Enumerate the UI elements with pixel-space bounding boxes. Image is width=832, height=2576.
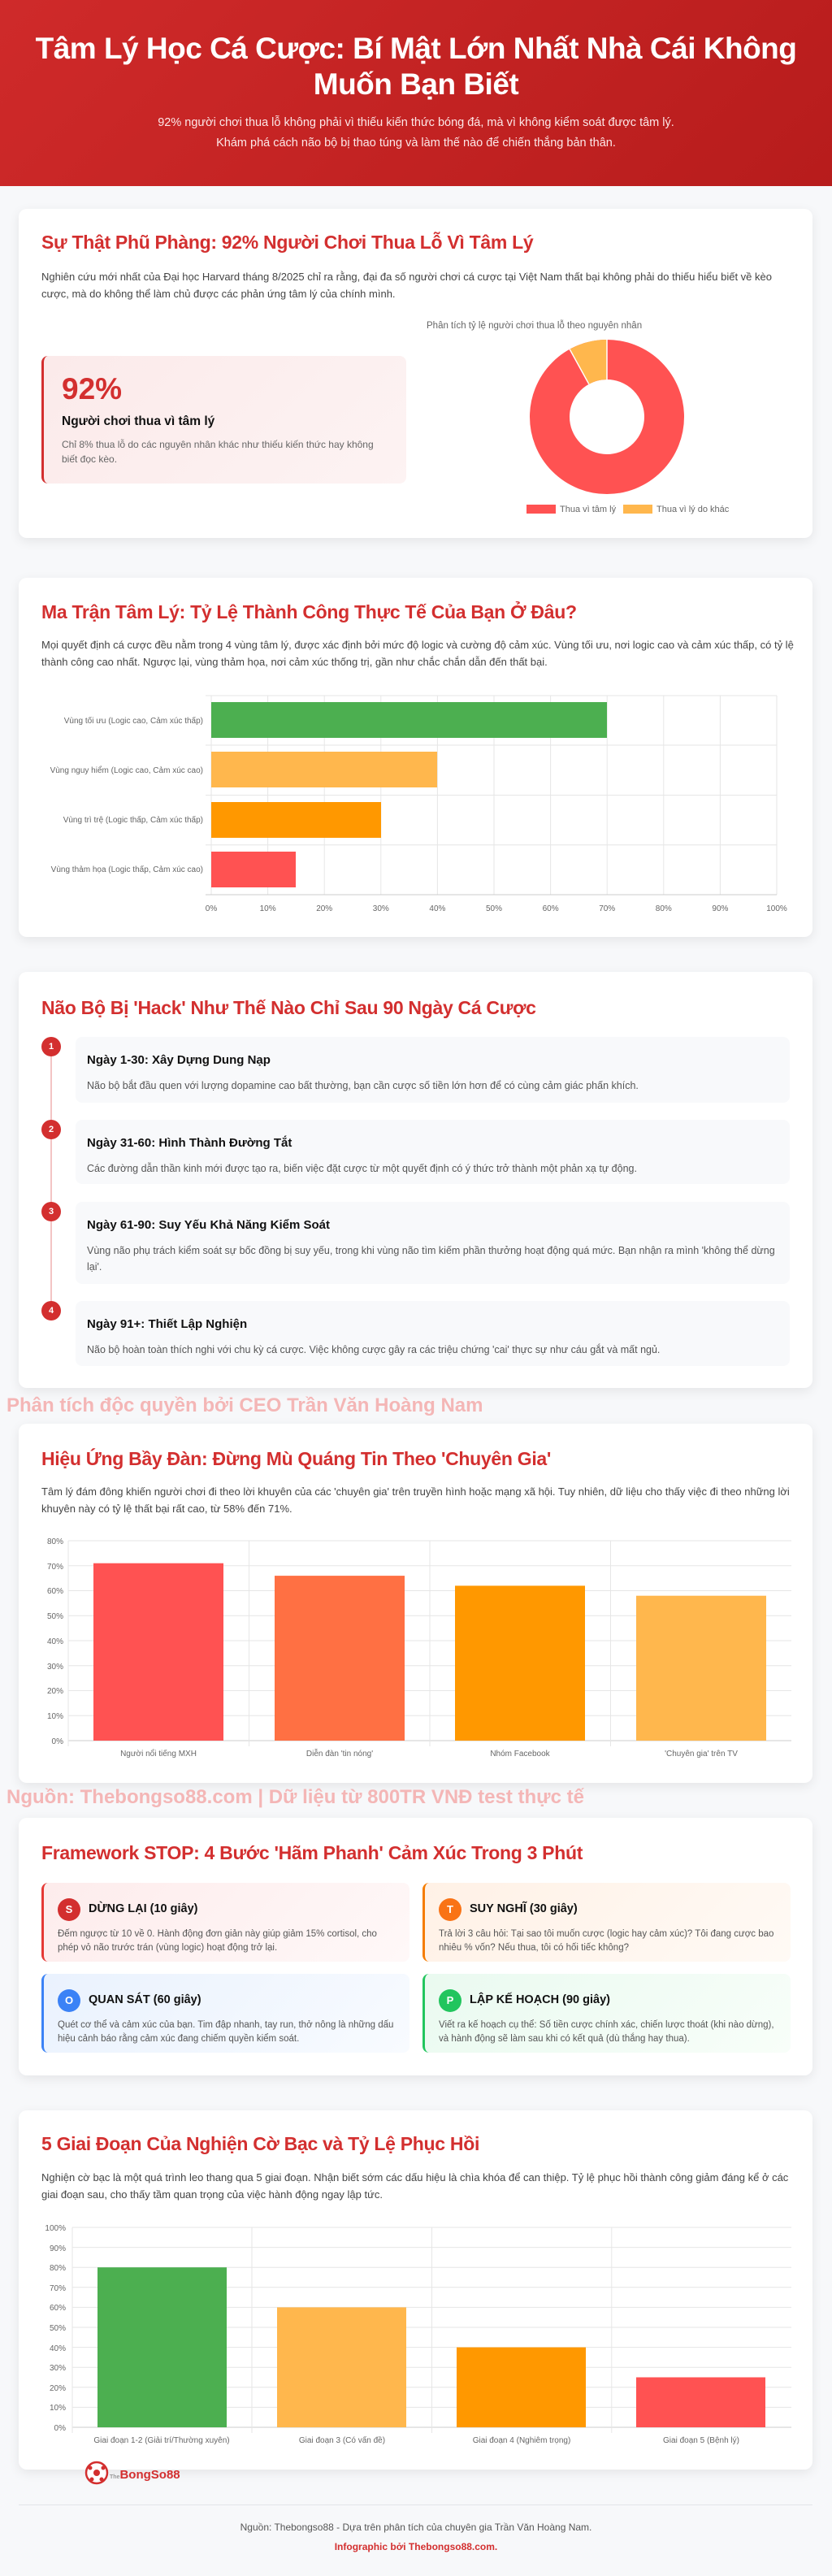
panel: herd effect [19,1424,812,1783]
step 1: 1 [49,1042,54,1052]
horizontal bar chart: Vùng thảm họa (Logic thấp, Cảm xúc cao) [51,865,203,874]
footer [240,2522,592,2552]
vertical bar chart: 40% [50,2344,66,2353]
vertical bar chart: 30% [50,2364,66,2373]
step 3: 3 [49,1207,54,1216]
vertical bar chart: 20% [47,1687,63,1696]
footer: Infographic bởi Thebongso88.com. [335,2541,497,2552]
step 1: Ngày 1-30: Xây Dựng Dung Nạp [87,1053,271,1067]
panel: STOP framework [19,1818,812,2075]
step T: SUY NGHĨ (30 giây) [470,1902,578,1915]
vertical bar chart: 0% [54,2424,66,2433]
horizontal bar chart: 40% [429,904,446,913]
horizontal bar chart: 60% [543,904,559,913]
pie chart: Thua vì lý do khác [656,505,730,514]
footer: Nguồn: Thebongso88 - Dựa trên phân tích của chuyên gia Trần Văn Hoàng Nam. [240,2522,592,2533]
step 1 [41,1037,639,1091]
panel: 5 stages [19,2110,812,2470]
step 2: Ngày 31-60: Hình Thành Đường Tắt [87,1136,292,1150]
step 4: Não bộ hoàn toàn thích nghi với chu kỳ cá cược. Việc không cược gây ra các triệu chứng 'cai' thực sự như cáu gắt và mất ngủ. [87,1344,660,1355]
vertical bar chart: 10% [47,1712,63,1721]
step 3: Ngày 61-90: Suy Yếu Khả Năng Kiểm Soát [87,1218,330,1232]
step O: QUAN SÁT (60 giây) [89,1993,202,2006]
stat callout: Chỉ 8% thua lỗ do các nguyên nhân khác như thiếu kiến thức hay không biết đọc kèo. [62,439,374,465]
horizontal bar chart: 0% [206,904,217,913]
horizontal bar chart: 20% [316,904,332,913]
text block: Nghiên cứu mới nhất của Đại học Harvard tháng 8/2025 chỉ ra rằng, đại đa số người chơi cá cược tại Việt Nam thất bại không phải do thiếu hiểu biết về kèo cược, mà do không thể làm chủ được các phản ứng tâm lý của chính mình. [41,271,772,300]
stat callout: 92% [62,372,122,405]
vertical bar chart: 10% [50,2404,66,2413]
vertical bar chart: 50% [50,2324,66,2333]
main title [36,32,796,101]
horizontal bar chart: 80% [656,904,672,913]
text block: Mọi quyết định cá cược đều nằm trong 4 vùng tâm lý, được xác định bởi mức độ logic và cường độ cảm xúc. Vùng tối ưu, nơi logic cao và cảm xúc thấp, có tỷ lệ thành công cao nhất. Ngược lại, vùng thảm họa, nơi cảm xúc thống trị, gần như chắc chắn dẫn đến thất bại. [41,639,794,668]
bars [93,1563,223,1741]
vertical bar chart: 70% [47,1563,63,1572]
step 1: Não bộ bắt đầu quen với lượng dopamine cao bất thường, bạn cần cược số tiền lớn hơn để có cùng cảm giác phấn khích. [87,1080,639,1091]
step S: DỪNG LẠI (10 giây) [89,1902,198,1915]
watermark 1: Phân tích độc quyền bởi CEO Trần Văn Hoàng Nam [6,1394,483,1416]
stat callout [41,356,406,484]
watermark 2: Nguồn: Thebongso88.com | Dữ liệu từ 800TR VNĐ test thực tế [6,1786,584,1808]
text block: Tâm lý đám đông khiến người chơi đi theo lời khuyên của các 'chuyên gia' trên truyền hình hoặc mạng xã hội. Tuy nhiên, dữ liệu cho thấy việc đi theo những lời khuyên này có tỷ lệ thất bại rất cao, từ 58% đến 71%. [41,1485,790,1515]
horizontal bar chart: 90% [712,904,729,913]
step P: P [447,1994,453,2006]
logo: TheBongSo88 [110,2468,180,2482]
vertical bar chart: Người nổi tiếng MXH [120,1749,197,1759]
horizontal bar chart: 100% [766,904,787,913]
bars [211,702,607,738]
header [0,0,832,186]
vertical bar chart: 60% [47,1587,63,1596]
vertical bar chart: 90% [50,2244,66,2253]
vertical bar chart: Giai đoạn 4 (Nghiêm trọng) [473,2436,570,2445]
panel: 92% truth [19,209,812,538]
vertical bar chart: 40% [47,1637,63,1646]
vertical bar chart: Giai đoạn 1-2 (Giải trí/Thường xuyên) [93,2436,230,2445]
heading: 5 Giai Đoạn Của Nghiện Cờ Bạc và Tỷ Lệ Phục Hồi [41,2133,479,2154]
panel: 90-day timeline [19,972,812,1388]
vertical bar chart [47,1537,791,1759]
step S: S [66,1903,72,1915]
vertical bar chart: 70% [50,2284,66,2293]
pie chart: Phân tích tỷ lệ người chơi thua lỗ theo nguyên nhân [427,320,642,331]
panel: psychology matrix [19,578,812,937]
vertical bar chart: Giai đoạn 5 (Bệnh lý) [663,2436,739,2445]
step 4 [41,1301,660,1355]
text block: Nghiện cờ bạc là một quá trình leo thang qua 5 giai đoạn. Nhận biết sớm các dấu hiệu là chìa khóa để can thiệp. Tỷ lệ phục hồi thành công giảm đáng kể ở các giai đoạn sau, cho thấy tầm quan trọng của việc hành động ngay lập tức. [41,2171,788,2201]
pie chart [427,320,730,514]
vertical bar chart: 0% [52,1737,63,1746]
horizontal bar chart: 50% [486,904,502,913]
vertical bar chart: Giai đoạn 3 (Có vấn đề) [299,2435,385,2445]
main title: Muốn Bạn Biết [314,67,518,101]
bars [98,2267,227,2427]
horizontal bar chart: 70% [599,904,615,913]
step 4: Ngày 91+: Thiết Lập Nghiện [87,1317,247,1331]
step T: Trả lời 3 câu hỏi: Tại sao tôi muốn cược (logic hay cảm xúc)? Tôi đang cược bao nhiêu % vốn? Nếu thua, tôi có hối tiếc không? [439,1929,774,1953]
step O: Quét cơ thể và cảm xúc của bạn. Tim đập nhanh, tay run, thở nông là những dấu hiệu cảnh báo rằng cảm xúc đang chiếm quyền kiểm soát. [58,2020,393,2044]
horizontal bar chart [50,696,787,913]
step P: LẬP KẾ HOẠCH (90 giây) [470,1993,610,2006]
vertical bar chart [45,2224,791,2445]
step O: O [65,1994,73,2006]
step P: Viết ra kế hoạch cụ thể: Số tiền cược chính xác, chiến lược thoát (khi nào dừng), và hành động sẽ làm sau khi có kết quả (dù thắng hay thua). [439,2020,774,2044]
horizontal bar chart: Vùng nguy hiểm (Logic cao, Cảm xúc cao) [50,765,203,775]
vertical bar chart: 80% [47,1537,63,1546]
horizontal bar chart: Vùng trì trệ (Logic thấp, Cảm xúc thấp) [63,815,203,825]
step S: Đếm ngược từ 10 về 0. Hành động đơn giản này giúp giảm 15% cortisol, cho phép vỏ não trước trán (vùng logic) hoạt động trở lại. [58,1929,377,1953]
subtitle: 92% người chơi thua lỗ không phải vì thiếu kiến thức bóng đá, mà vì không kiểm soát được tâm lý. [158,116,674,129]
horizontal bar chart: 10% [260,904,276,913]
subtitle [158,115,674,150]
pie chart: Thua vì tâm lý [560,505,617,514]
step 2: Các đường dẫn thần kinh mới được tạo ra, biến việc đặt cược từ một quyết định có ý thức trở thành một phản xạ tự động. [87,1163,637,1174]
step 2: 2 [49,1125,54,1134]
vertical bar chart: 50% [47,1612,63,1621]
step T: T [447,1903,453,1915]
logo [84,2461,180,2485]
heading: Não Bộ Bị 'Hack' Như Thế Nào Chỉ Sau 90 Ngày Cá Cược [41,997,536,1018]
vertical bar chart: 30% [47,1663,63,1672]
horizontal bar chart: Vùng tối ưu (Logic cao, Cảm xúc thấp) [64,716,203,726]
heading: Sự Thật Phũ Phàng: 92% Người Chơi Thua Lỗ Vì Tâm Lý [41,232,533,253]
vertical bar chart: 80% [50,2264,66,2273]
main title: Tâm Lý Học Cá Cược: Bí Mật Lớn Nhất Nhà Cái Không [36,32,796,65]
step O [41,1974,410,2053]
step S [41,1883,410,1962]
step P [422,1974,791,2053]
stat callout: Người chơi thua vì tâm lý [62,414,214,428]
vertical bar chart: Nhóm Facebook [490,1750,551,1759]
vertical bar chart: 60% [50,2304,66,2313]
horizontal bar chart: 30% [373,904,389,913]
legend [526,505,556,514]
vertical bar chart: 100% [45,2224,66,2233]
vertical bar chart: 20% [50,2384,66,2393]
step T [422,1883,791,1962]
vertical bar chart: Diễn đàn 'tin nóng' [306,1748,373,1759]
step 3: Vùng não phụ trách kiểm soát sự bốc đồng bị suy yếu, trong khi vùng não tìm kiếm phần thưởng hoạt động quá mức. Bạn nhận ra mình 'không thể dừng lại'. [87,1245,775,1273]
step 4: 4 [49,1306,54,1316]
heading: Hiệu Ứng Bầy Đàn: Đừng Mù Quáng Tin Theo 'Chuyên Gia' [41,1448,551,1469]
step 3 [41,1202,775,1273]
heading: Framework STOP: 4 Bước 'Hãm Phanh' Cảm Xúc Trong 3 Phút [41,1842,583,1863]
vertical bar chart: 'Chuyên gia' trên TV [665,1750,738,1759]
step 2 [41,1120,637,1174]
heading: Ma Trận Tâm Lý: Tỷ Lệ Thành Công Thực Tế Của Bạn Ở Đâu? [41,601,577,622]
subtitle: Khám phá cách não bộ bị thao túng và làm thế nào để chiến thắng bản thân. [216,137,616,150]
